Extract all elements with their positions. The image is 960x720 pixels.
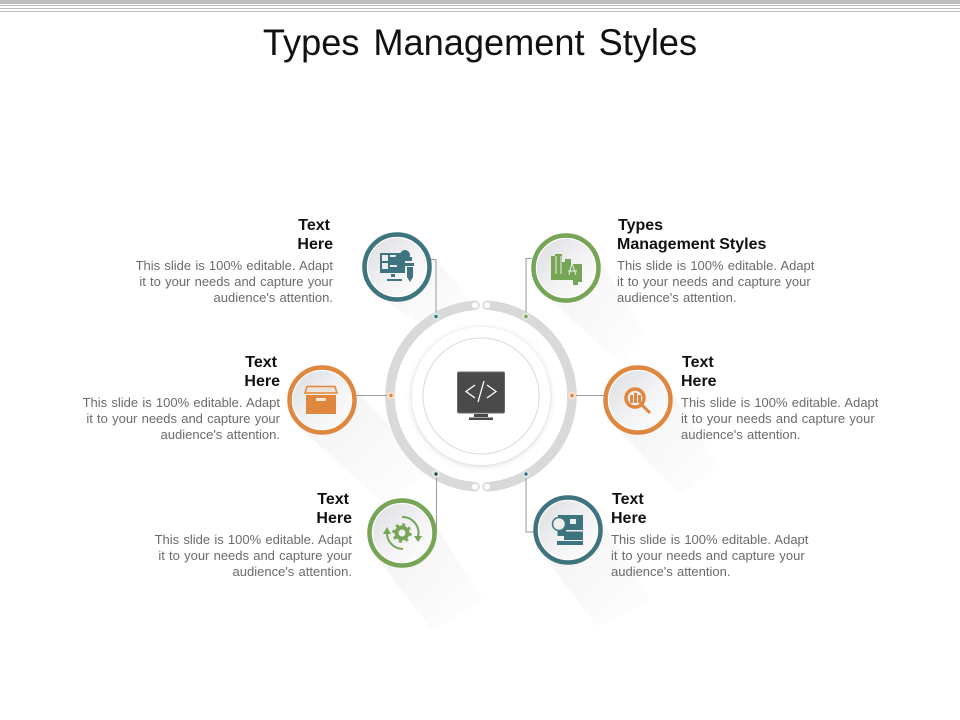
text: left: This slide is 100% editable. Adapt — [83, 395, 280, 410]
node: right, orange — [606, 368, 670, 432]
text: top left: it to your needs and capture your — [139, 274, 333, 289]
text: top right: This slide is 100% editable. Adapt — [617, 258, 814, 273]
text: right: Here — [681, 373, 717, 390]
text: right: audience's attention. — [681, 427, 800, 442]
long shadows — [297, 243, 718, 630]
icon: code monitor — [458, 372, 504, 420]
text: bottom left: Here — [316, 510, 352, 527]
title: Types Management Styles — [263, 22, 697, 63]
icon: archive box — [305, 386, 337, 414]
text: right: it to your needs and capture your — [681, 411, 875, 426]
text: right — [681, 354, 878, 442]
text: right: This slide is 100% editable. Adapt — [681, 395, 878, 410]
connector lines — [356, 258, 604, 532]
icon: magnifier with bars — [626, 389, 650, 413]
text: left: it to your needs and capture your — [86, 411, 280, 426]
text: top right: Types — [618, 217, 663, 234]
text: bottom left: This slide is 100% editable. Adapt — [155, 532, 352, 547]
text: bottom right: audience's attention. — [611, 564, 730, 579]
icon: idea document — [552, 515, 583, 545]
inner disc — [412, 327, 550, 465]
text: top left: Here — [297, 236, 333, 253]
text: top right: Management Styles — [617, 236, 766, 253]
text: bottom left: audience's attention. — [233, 564, 352, 579]
text: top left: This slide is 100% editable. Adapt — [136, 258, 333, 273]
text: top right: audience's attention. — [617, 290, 736, 305]
icon: blueprint — [551, 254, 582, 285]
node: top right, green — [534, 236, 598, 300]
text: top right: it to your needs and capture your — [617, 274, 811, 289]
text: bottom left: Text — [317, 491, 349, 508]
text: bottom left: it to your needs and capture your — [158, 548, 352, 563]
text: left: audience's attention. — [161, 427, 280, 442]
node: top left, teal — [364, 234, 430, 300]
text: bottom right: This slide is 100% editable. Adapt — [611, 532, 808, 547]
text: bottom right: Text — [612, 491, 644, 508]
text: bottom right — [611, 491, 808, 579]
node: bottom right, teal — [536, 498, 600, 562]
text: top right — [617, 217, 814, 305]
text: left: Text — [245, 354, 277, 371]
connector dots — [387, 312, 576, 478]
text: right: Text — [682, 354, 714, 371]
node: bottom left, green — [370, 500, 434, 566]
text: bottom right: it to your needs and capture your — [611, 548, 805, 563]
text: top left — [136, 217, 333, 305]
text: top left: audience's attention. — [214, 290, 333, 305]
text: left: Here — [244, 373, 280, 390]
icon: computer with cloud — [380, 250, 414, 282]
icon: gear with arrows — [383, 517, 422, 549]
central ring — [390, 300, 572, 491]
text: left — [82, 354, 280, 442]
text: top left: Text — [298, 217, 330, 234]
node: left, orange — [290, 368, 354, 432]
text: bottom right: Here — [611, 510, 647, 527]
text: bottom left — [154, 491, 352, 579]
